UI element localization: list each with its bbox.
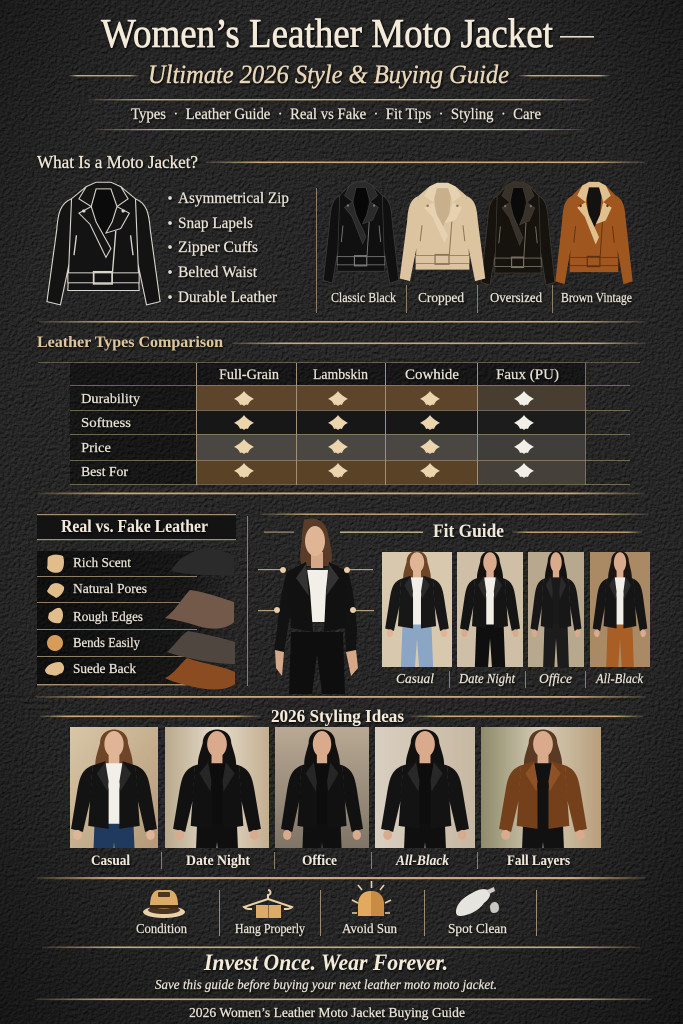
table row labels: Softness — [81, 416, 131, 431]
tagline: Invest Once. Wear Forever. — [203, 950, 448, 975]
navigation topics: Types · Leather Guide · Real vs Fake · Fit Tips · Styling · Care — [131, 106, 541, 123]
table row fills — [196, 385, 585, 484]
icon: hanger — [244, 890, 292, 918]
jacket labels: Oversized — [490, 291, 542, 306]
closing callout — [35, 950, 652, 1020]
feature bullet list: Belted Waist — [178, 264, 258, 281]
table column headers: Cowhide — [405, 367, 459, 383]
footer: 2026 Women’s Leather Moto Jacket Buying Guide — [189, 1005, 465, 1020]
section: what is a moto jacket — [37, 152, 645, 313]
jacket labels: Cropped — [418, 291, 464, 306]
heading: styling ideas: 2026 Styling Ideas — [271, 706, 404, 726]
photo: casual fit — [382, 551, 452, 683]
row text — [73, 555, 147, 676]
panel: real vs fake leather — [37, 514, 236, 690]
care labels: Condition — [136, 922, 187, 937]
icon: sun — [352, 881, 391, 916]
photo: date night fit — [457, 551, 523, 683]
measurement lines — [258, 569, 374, 611]
table panel — [70, 363, 585, 485]
feature bullet list — [168, 190, 289, 306]
comparison rows — [37, 551, 236, 685]
care labels: Spot Clean — [448, 922, 507, 937]
jacket labels — [331, 291, 632, 306]
jacket: cropped — [400, 182, 486, 282]
heading: leather comparison: Leather Types Comparison — [37, 334, 223, 351]
jacket: brown vintage — [555, 182, 633, 284]
heading: fit guide: Fit Guide — [433, 521, 504, 542]
icon: line-art jacket — [46, 182, 161, 306]
icon: cleaning bottle — [456, 887, 499, 916]
panel: fit guide — [258, 514, 650, 694]
styling labels: Date Night — [186, 853, 250, 869]
feature bullet list: Zipper Cuffs — [178, 239, 258, 256]
fit guide labels: Office — [539, 672, 572, 687]
fit guide labels: Date Night — [458, 672, 516, 687]
feature bullet list: Snap Lapels — [178, 215, 253, 232]
fit guide labels: Casual — [396, 672, 434, 687]
styling labels: Casual — [91, 853, 130, 869]
leather swatches — [165, 548, 235, 690]
styling labels: All-Black — [395, 853, 449, 869]
row text: Rich Scent — [73, 555, 131, 570]
table row labels — [81, 392, 140, 480]
table row labels: Price — [81, 441, 111, 456]
icon: conditioner hat — [143, 890, 185, 918]
photo: fall layers — [481, 727, 601, 898]
photo: casual — [70, 727, 158, 898]
feature bullet list: Asymmetrical Zip — [178, 190, 289, 207]
photo: all-black — [375, 727, 475, 898]
row text: Natural Pores — [73, 581, 147, 596]
table column headers: Full-Grain — [219, 367, 280, 383]
title: Women’s Leather Moto Jacket — [101, 10, 554, 56]
styling labels: Office — [302, 853, 337, 869]
table column headers: Lambskin — [313, 367, 369, 383]
figure with jacket — [274, 519, 358, 694]
fit guide labels — [396, 672, 644, 687]
care labels: Avoid Sun — [342, 922, 397, 937]
table row labels: Best For — [81, 465, 128, 480]
table row labels: Durability — [81, 392, 140, 407]
photo: all-black fit — [590, 551, 650, 683]
heading: real vs fake: Real vs. Fake Leather — [61, 516, 208, 536]
photo: office — [275, 727, 369, 898]
photo: office fit — [528, 551, 584, 683]
rating markers — [234, 391, 534, 478]
row text: Suede Back — [73, 661, 136, 676]
feature bullet list: Durable Leather — [178, 289, 278, 306]
heading: what is a moto jacket: What Is a Moto Jacket? — [37, 152, 198, 172]
care labels: Hang Properly — [235, 922, 305, 937]
table column headers: Faux (PU) — [496, 367, 559, 383]
section: styling ideas — [40, 706, 643, 898]
styling labels: Fall Layers — [507, 853, 570, 869]
jacket labels: Brown Vintage — [561, 291, 632, 306]
section: care tips — [136, 881, 537, 937]
row text: Rough Edges — [73, 609, 143, 624]
subtitle: Ultimate 2026 Style & Buying Guide — [148, 60, 509, 89]
styling labels — [91, 853, 570, 869]
jacket: classic black — [323, 182, 399, 284]
fit guide labels: All-Black — [595, 672, 644, 687]
care labels — [136, 922, 507, 937]
row icons — [45, 555, 64, 676]
table column headers — [219, 367, 559, 383]
save note: Save this guide before buying your next leather moto moto jacket. — [155, 977, 497, 992]
jacket labels: Classic Black — [331, 291, 396, 306]
jacket: oversized — [480, 182, 556, 286]
photo: date night — [165, 727, 269, 898]
row text: Bends Easily — [73, 635, 140, 650]
section: leather types comparison — [37, 334, 645, 485]
